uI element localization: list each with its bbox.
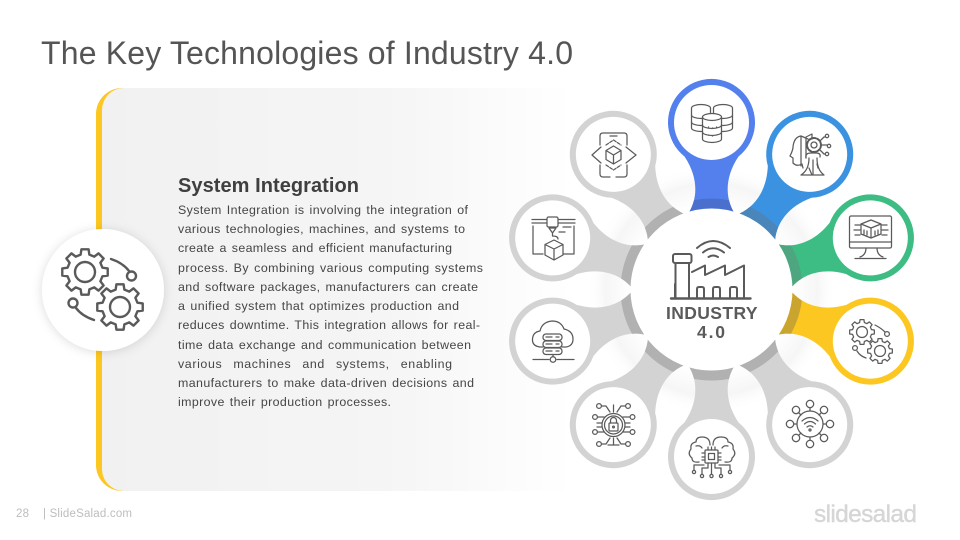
petal: additive manufacturing (gray) [509, 194, 644, 286]
icon: monitor with cube [850, 216, 892, 258]
panel body text: various machines and systems, enabling [178, 357, 452, 371]
footer: site name: | SlideSalad.com [43, 508, 132, 520]
panel body text: create a seamless and efficient manufacturing [178, 241, 452, 255]
panel body text: and software packages, manufacturers can create [178, 280, 478, 294]
panel background [102, 88, 572, 491]
footer: logo: slidesalad [814, 501, 917, 528]
footer: page number: 28 [16, 508, 29, 520]
hub: center circle: 4.0 [697, 322, 725, 342]
soft halo behind hub [586, 164, 836, 414]
icon: brain chip [689, 437, 735, 478]
icon: gears [850, 320, 892, 363]
panel body text: a unified system that optimizes production and [178, 299, 459, 313]
petal: data storage (blue) [668, 78, 755, 212]
diagram: industry 4.0 hub [509, 78, 914, 500]
icon: AR phone [592, 133, 636, 177]
yellow accent bar [96, 88, 130, 491]
petal: system integration (yellow, active) [779, 292, 914, 385]
panel body text: process. By combining various computing systems [178, 261, 483, 275]
petal: artificial intelligence (sky blue) [740, 110, 854, 240]
petal: edge computing brain chip (gray) [668, 368, 755, 500]
petal: cyber security (gray) [570, 340, 684, 468]
panel: system integration [96, 88, 572, 491]
petal: cloud computing (gray) [509, 292, 644, 385]
petal: augmented reality (gray) [570, 110, 684, 240]
panel body text: reduces downtime. This integration allows for real- [178, 318, 480, 332]
title: The Key Technologies of Industry 4.0 [41, 35, 573, 71]
icon: database [692, 104, 732, 142]
icon: AI head [790, 134, 831, 175]
panel body text: time data exchange and communication between [178, 338, 471, 352]
panel body text [178, 203, 483, 409]
panel body text: various technologies, machines, and systems to [178, 222, 465, 236]
hub: center circle [630, 208, 792, 370]
icon: 3D printer [532, 217, 575, 260]
icon: smart factory [671, 241, 750, 298]
petal: internet of things (gray) [740, 340, 854, 468]
icon: wifi network [786, 400, 834, 448]
panel body text: System Integration is involving the integration of [178, 203, 469, 217]
panel body text: improve their production processes. [178, 395, 391, 409]
panel heading: System Integration [178, 175, 359, 197]
icon: cloud server [532, 321, 574, 362]
petal: computer simulation (green) [779, 194, 914, 286]
hub label: INDUSTRY [666, 303, 758, 323]
icon: security lock circuit [593, 404, 635, 446]
icon: system integration gears badge [42, 229, 164, 351]
panel body text: manufacturers to make data-driven decisions and [178, 376, 474, 390]
